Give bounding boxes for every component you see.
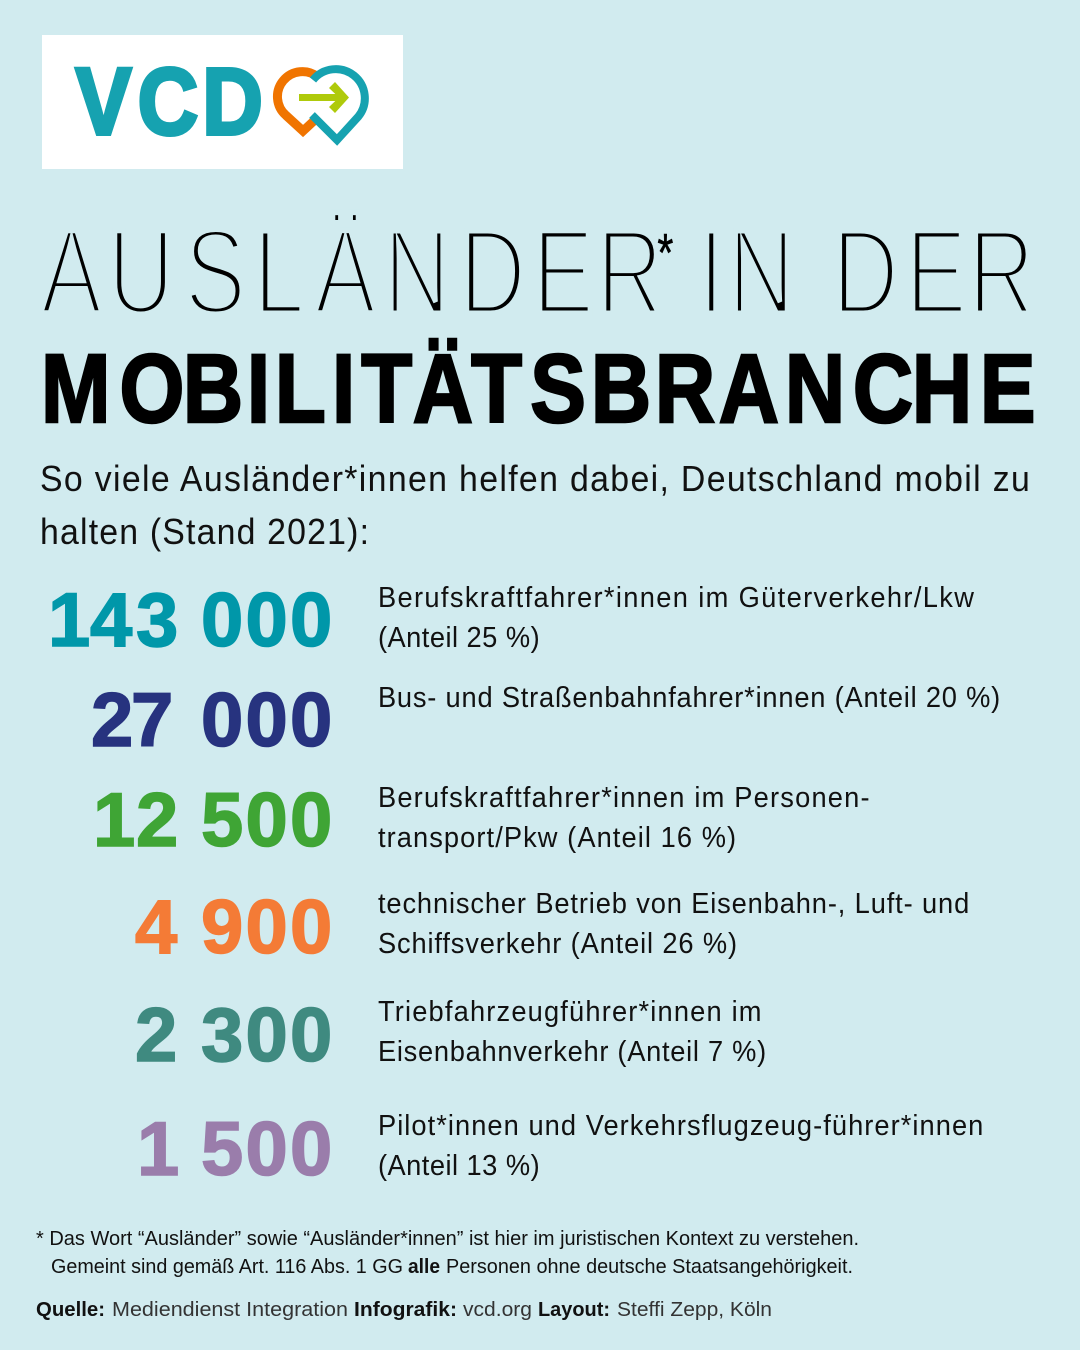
footnote [36,1227,859,1278]
source and credits: Quelle: [36,1299,105,1321]
row: 2 300: 2 300 [135,993,332,1078]
title line 1: * [657,224,673,283]
row: 1 500: (Anteil 13 %) [378,1149,540,1181]
title line 2: MOBILITÄTSBRANCHE [41,335,1036,443]
title line 1: AUSLÄNDER [41,204,663,339]
logo panel [42,35,403,169]
title line 1: IN [698,204,794,339]
row: 2 300: Eisenbahnverkehr (Anteil 7 %) [378,1035,766,1067]
source and credits: vcd.org [463,1299,532,1321]
title line 1 [41,204,1035,339]
intro text [40,459,1030,552]
source and credits [36,1299,772,1321]
row: 4 900 [135,885,969,970]
row: 1 500: Pilot*innen und Verkehrsflugzeug-führer*innen [378,1109,983,1141]
logo wordmark: VCD [76,48,263,154]
footnote: Gemeint sind gemäß Art. 116 Abs. 1 GG [51,1255,403,1278]
intro text: halten (Stand 2021): [40,512,369,552]
icon: two hearts with arrow [277,69,365,140]
row: 1 500 [137,1107,983,1192]
source and credits: Layout: [538,1299,610,1321]
row: 27 000 [91,678,1000,763]
row: 143 000: Berufskraftfahrer*innen im Güterverkehr/Lkw [378,581,975,613]
row: 143 000 [48,578,975,663]
row: 12 500: transport/Pkw (Anteil 16 %) [378,821,736,853]
footnote: Personen ohne deutsche Staatsangehörigkeit. [446,1255,853,1278]
row: 4 900: 4 900 [135,885,332,970]
source and credits: Steffi Zepp, Köln [617,1299,772,1321]
row: 27 000: 27 000 [91,678,332,763]
row: 12 500 [93,778,870,863]
row: 1 500: 1 500 [137,1107,332,1192]
row: 4 900: Schiffsverkehr (Anteil 26 %) [378,927,737,959]
row: 143 000: (Anteil 25 %) [378,621,540,653]
title line 1: DER [832,204,1035,339]
footnote: alle [408,1256,440,1278]
title [41,204,1036,443]
source and credits: Infografik: [354,1299,457,1321]
row: 4 900: technischer Betrieb von Eisenbahn-, Luft- und [378,887,969,919]
row: 12 500: 12 500 [93,778,332,863]
intro text: So viele Ausländer*innen helfen dabei, Deutschland mobil zu [40,459,1030,499]
row: 2 300 [135,993,766,1078]
row: 12 500: Berufskraftfahrer*innen im Personen- [378,781,870,813]
source and credits: Mediendienst Integration [112,1299,348,1321]
footnote: * Das Wort “Ausländer” sowie “Ausländer*innen” ist hier im juristischen Kontext zu verstehen. [36,1227,859,1250]
row: 27 000: Bus- und Straßenbahnfahrer*innen (Anteil 20 %) [378,681,1000,713]
row: 2 300: Triebfahrzeugführer*innen im [378,995,761,1027]
row: 143 000: 143 000 [48,578,332,663]
